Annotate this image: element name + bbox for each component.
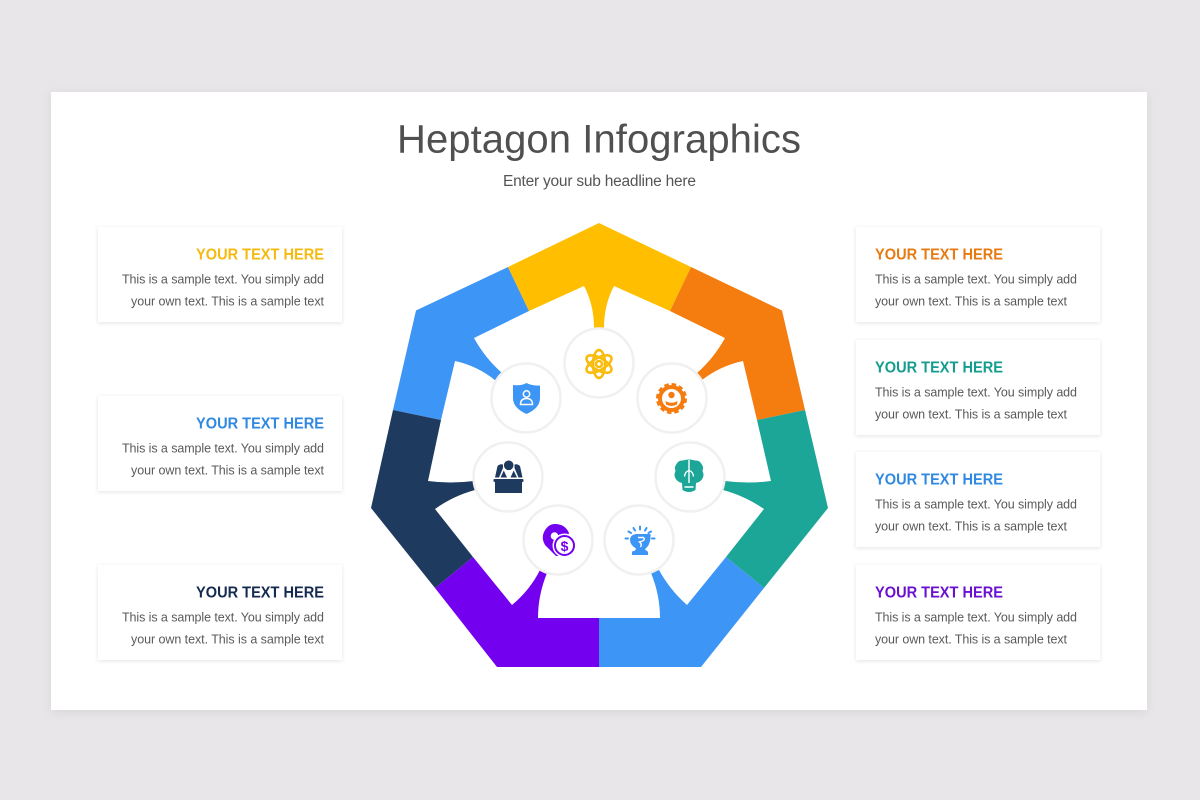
icon circle: fist with alert — [604, 506, 674, 574]
card: blue text right: your own text. This is a sample text — [875, 520, 1068, 534]
card: yellow text — [98, 227, 342, 322]
card: teal text: This is a sample text. You simply add — [875, 386, 1077, 400]
icon circle: location pin with dollar — [524, 506, 592, 574]
segment: navy — [371, 410, 475, 588]
title: Heptagon Infographics — [397, 118, 801, 162]
segment: teal — [723, 410, 828, 588]
card: blue text left: YOUR TEXT HERE — [196, 416, 324, 432]
card: orange text: YOUR TEXT HERE — [875, 246, 1003, 264]
heptagon diagram — [371, 223, 828, 667]
card: blue text left: This is a sample text. You simply add — [122, 442, 324, 456]
icon circle: brain bulb — [656, 442, 724, 512]
segment: purple — [435, 557, 599, 667]
icon circle: shield with person — [492, 364, 560, 432]
icon circle: atom — [564, 328, 634, 398]
segment: blue bottom — [599, 557, 764, 667]
segment: blue upper left — [393, 267, 529, 420]
slide panel — [51, 92, 1147, 710]
card: navy text: your own text. This is a sample text — [131, 633, 325, 647]
card: purple text: This is a sample text. You simply add — [875, 610, 1077, 624]
card: blue text right — [856, 452, 1100, 547]
card: blue text right: This is a sample text. You simply add — [875, 498, 1077, 512]
card: blue text right: YOUR TEXT HERE — [875, 472, 1003, 488]
card: teal text: your own text. This is a sample text — [875, 408, 1068, 422]
icon circle: location pin with dollar: $ — [561, 538, 569, 554]
icon circle: podium — [474, 442, 542, 512]
card: yellow text: This is a sample text. You simply add — [122, 272, 324, 286]
card: purple text — [856, 565, 1100, 660]
subtitle: Enter your sub headline here — [503, 173, 696, 190]
card: yellow text: your own text. This is a sample text — [131, 295, 325, 309]
card: teal text: YOUR TEXT HERE — [875, 360, 1003, 376]
card: purple text: your own text. This is a sample text — [875, 633, 1068, 647]
card: navy text — [98, 565, 342, 660]
segment: yellow top — [508, 223, 691, 328]
card: navy text: This is a sample text. You simply add — [122, 610, 324, 624]
card: yellow text: YOUR TEXT HERE — [196, 246, 324, 264]
card: blue text left: your own text. This is a sample text — [131, 464, 325, 478]
card: orange text — [856, 227, 1100, 322]
card: purple text: YOUR TEXT HERE — [875, 584, 1003, 602]
icon circle: gear with person — [638, 364, 706, 432]
card: blue text left — [98, 396, 342, 491]
segment: orange — [670, 267, 805, 420]
card: navy text: YOUR TEXT HERE — [196, 584, 324, 602]
card: teal text — [856, 340, 1100, 435]
card: orange text: This is a sample text. You simply add — [875, 272, 1077, 286]
card: orange text: your own text. This is a sample text — [875, 295, 1068, 309]
